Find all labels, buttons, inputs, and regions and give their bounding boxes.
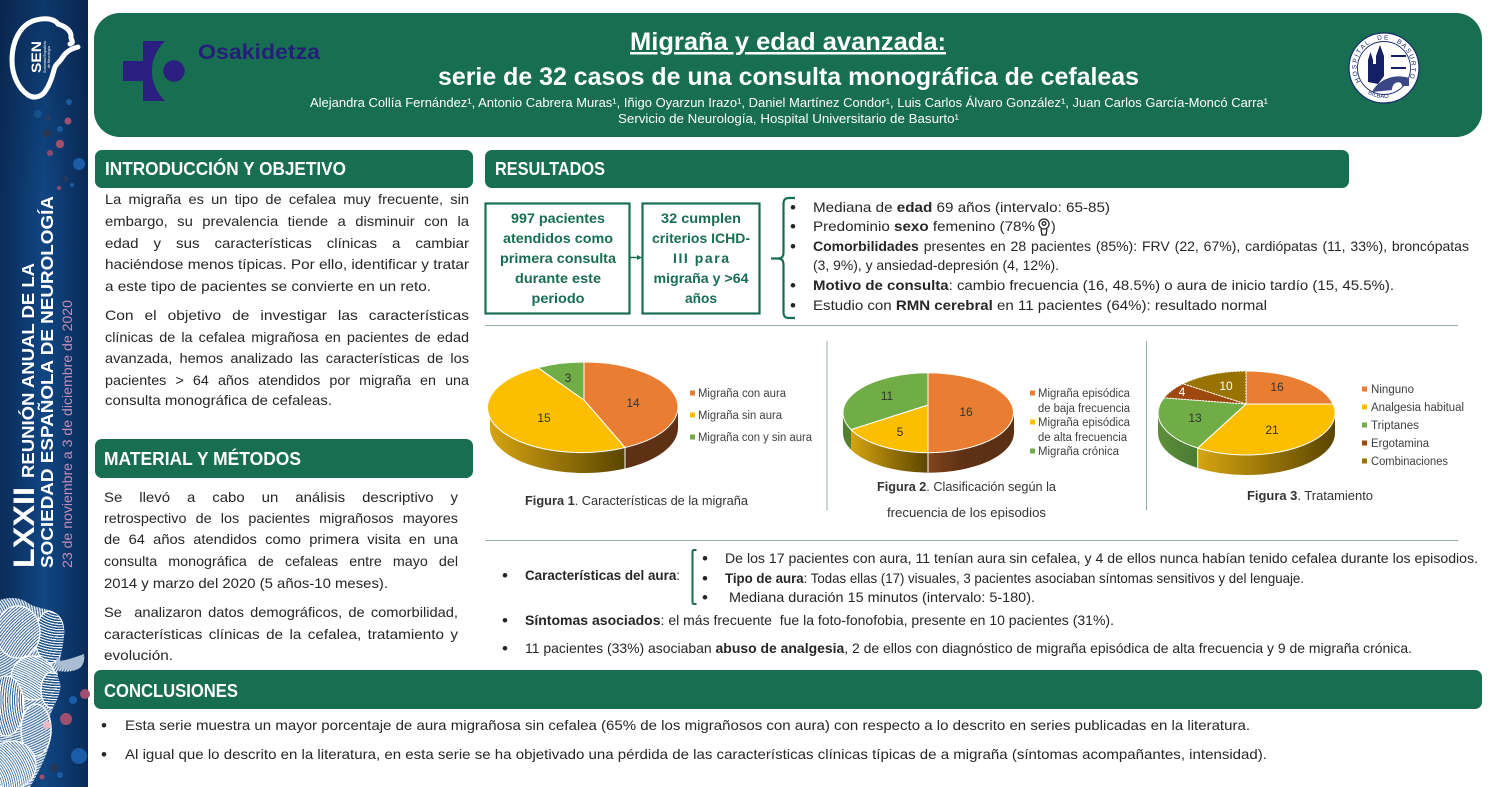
results list: [790, 198, 1469, 315]
results list: •: [790, 296, 796, 315]
results list: •: [790, 276, 796, 295]
vertical congress title: REUNIÓN ANUAL DE LA: [17, 263, 38, 478]
text block: material y métodos: Se analizaron datos demográficos, de comorbilidad,: [104, 604, 458, 620]
hospital seal: [1348, 32, 1420, 104]
aura characteristics block: •: [702, 549, 708, 568]
Osakidetza logo: Osakidetza: [198, 41, 320, 64]
heading: resultados: [485, 150, 1349, 188]
caption: figura 2: [877, 480, 1056, 520]
SEN logo: Sociedad Española: [43, 41, 47, 73]
chart: figura 1 pie: 15: [537, 411, 551, 425]
chart: figura 1 pie: 14: [626, 396, 640, 410]
text block: material y métodos: Se llevó a cabo un análisis descriptivo y: [104, 489, 458, 505]
chart: figura 3 pie: 21: [1265, 423, 1279, 437]
caption: figura 3: Figura 3. Tratamiento: [1247, 489, 1373, 503]
flow box: criterios ICHD: 32 cumplen: [661, 210, 741, 226]
poster subtitle: serie de 32 casos de una consulta monográfica de cefaleas: [438, 63, 1139, 91]
results list: ): [1051, 218, 1056, 234]
legend: figura 1: Migraña con aura: [698, 388, 787, 400]
left sidebar banner: [0, 0, 90, 787]
heading: conclusiones: [94, 670, 1482, 709]
icon: female patient: [1039, 219, 1049, 235]
aura characteristics block: Características del aura:: [525, 567, 680, 583]
chart: figura 3 pie: 4: [1179, 385, 1186, 399]
brain illustration: [0, 590, 90, 787]
header panel: [94, 13, 1482, 137]
results list: Motivo de consulta : cambio frecuencia (16, 48.5%) o aura de inicio tardío (15, 45.5%).: [813, 277, 1394, 293]
text block: introducción: embargo, su prevalencia tiende a disminuir con la: [105, 213, 469, 229]
legend: figura 1: [690, 388, 813, 444]
vertical congress title: LXXII: [8, 487, 41, 568]
results list: •: [790, 237, 796, 256]
chart: figura 1 pie: 3: [565, 371, 572, 385]
legend: figura 2: Migraña episódica: [1038, 388, 1131, 400]
text block: introducción: consulta monográfica de cefaleas.: [105, 392, 332, 408]
aura characteristics block: De los 17 pacientes con aura, 11 tenían aura sin cefalea, y 4 de ellos nunca habían tenido cefalea durante los episodios.: [725, 550, 1478, 566]
arrow between boxes: [630, 255, 642, 260]
heading: resultados: RESULTADOS: [495, 159, 605, 179]
heading: introducción y objetivo: [95, 150, 473, 188]
legend: figura 3: Ergotamina: [1371, 438, 1430, 450]
flow box: criterios ICHD: años: [685, 290, 717, 306]
legend: figura 3: Ninguno: [1371, 384, 1414, 396]
results list: Comorbilidades presentes en 28 pacientes (85%): FRV (22, 67%), cardiópatas (11, 33%), broncópatas: [813, 238, 1469, 254]
conclusions list: Esta serie muestra un mayor porcentaje de aura migrañosa sin cefalea (65% de los migrañosos con aura) con respecto a lo descrito en series publicadas en la literatura.: [125, 717, 1250, 733]
chart: figura 3 pie: [1158, 371, 1335, 475]
results list: Estudio con RMN cerebral en 11 pacientes (64%): resultado normal: [813, 297, 1267, 313]
Osakidetza logo: [123, 41, 320, 101]
flow box: pacientes atendidos: 997 pacientes: [511, 210, 605, 226]
results list: Mediana de edad 69 años (intervalo: 65-85): [813, 199, 1110, 215]
flow box: criterios ICHD: [642, 204, 760, 314]
analgesic abuse: •: [502, 639, 508, 658]
legend: figura 3: Analgesia habitual: [1371, 402, 1464, 414]
legend: figura 2: [1030, 388, 1131, 458]
caption: figura 1: Figura 1. Características de la migraña: [525, 494, 748, 508]
heading: conclusiones: CONCLUSIONES: [104, 681, 238, 701]
legend: figura 2: de alta frecuencia: [1038, 432, 1128, 444]
legend: figura 1: Migraña con y sin aura: [698, 432, 813, 444]
SEN logo: de Neurología: [47, 46, 51, 68]
text block: introducción: pacientes > 64 años atendidos por migraña en una: [105, 372, 469, 388]
legend: figura 3: Combinaciones: [1371, 456, 1448, 468]
flow box: criterios ICHD: migraña y >64: [654, 270, 749, 286]
caption: figura 2: frecuencia de los episodios: [887, 506, 1046, 520]
poster title: Migraña y edad avanzada:: [630, 28, 946, 56]
vertical congress title: SOCIEDAD ESPAÑOLA DE NEUROLOGÍA: [36, 196, 57, 568]
congress dates: 23 de noviembre a 3 de diciembre de 2020: [59, 300, 75, 568]
analgesic abuse: 11 pacientes (33%) asociaban abuso de analgesia, 2 de ellos con diagnóstico de migraña episódica de alta frecuencia y 9 de migraña crónica.: [525, 640, 1412, 656]
authors: Alejandra Collía Fernández¹, Antonio Cabrera Muras¹, Iñigo Oyarzun Irazo¹, Daniel Martínez Condor¹, Luis Carlos Álvaro González¹, Juan Carlos García-Moncó Carra¹: [310, 95, 1268, 110]
associated symptoms: •: [502, 611, 508, 630]
text block: introducción: clínicas de la cefalea migrañosa en pacientes de edad: [105, 329, 469, 345]
text block: material y métodos: consulta monográfica de cefaleas entre mayo del: [104, 553, 458, 569]
flow box: criterios ICHD: III para: [673, 250, 729, 266]
conclusions list: •: [101, 716, 107, 735]
conclusions list: •: [101, 745, 107, 764]
flow box: pacientes atendidos: primera consulta: [500, 250, 616, 266]
text block: material y métodos: de 64 años atendidos como primera visita en una: [104, 531, 458, 547]
SEN logo: [12, 19, 78, 97]
hospital seal: HOSPITAL DE BASURTO: [1352, 35, 1416, 84]
aura characteristics block: Mediana duración 15 minutos (intervalo: 5-180).: [729, 589, 1035, 605]
text block: introducción: haciéndose menos típicas. Por ello, identificar y tratar: [105, 256, 469, 272]
conclusions list: Al igual que lo descrito en la literatura, en esta serie se ha objetivado una pérdida de las características clínicas típicas de a migraña (síntomas acompañantes, intensidad).: [125, 746, 1267, 762]
flow box: pacientes atendidos: atendidos como: [503, 230, 613, 246]
results list: Predominio sexo femenino (78%: [813, 218, 1035, 234]
results list: •: [790, 198, 796, 217]
text block: material y métodos: 2014 y marzo del 2020 (5 años-10 meses).: [104, 575, 388, 591]
text block: material y métodos: evolución.: [104, 647, 173, 663]
decorative network dots, top: [34, 99, 85, 190]
text block: introducción: avanzada, hemos analizado las características de los: [105, 350, 469, 366]
text block: introducción: [105, 191, 469, 408]
results list: (3, 9%), y ansiedad-depresión (4, 12%).: [813, 257, 1059, 273]
legend: figura 3: [1362, 384, 1464, 468]
aura characteristics block: Tipo de aura: Todas ellas (17) visuales, 3 pacientes asociaban síntomas sensitivos y del lenguaje.: [725, 570, 1304, 586]
heading: introducción y objetivo: INTRODUCCIÓN Y OBJETIVO: [105, 158, 346, 179]
legend: figura 2: Migraña crónica: [1038, 446, 1120, 458]
text block: introducción: La migraña es un tipo de cefalea muy frecuente, sin: [105, 191, 469, 207]
hospital seal: BILBAO: [1368, 90, 1388, 98]
aura characteristics block: •: [502, 566, 508, 585]
chart: figura 1 pie: [487, 362, 678, 473]
chart: figura 3 pie: 16: [1270, 380, 1284, 394]
text block: introducción: Con el objetivo de investigar las características: [105, 307, 469, 323]
chart: figura 3 pie: 10: [1219, 379, 1233, 393]
SEN logo: SEN: [28, 41, 44, 73]
text block: material y métodos: [104, 489, 458, 663]
aura characteristics block: [502, 549, 1478, 607]
decorative network dots, bottom: [40, 689, 90, 780]
chart: figura 2 pie: 16: [959, 405, 973, 419]
chart: figura 3 pie: 13: [1188, 411, 1202, 425]
text block: introducción: edad y sus características clínicas a cambiar: [105, 235, 469, 251]
legend: figura 3: Triptanes: [1371, 420, 1419, 432]
heading: material y métodos: [95, 439, 473, 478]
heading: material y métodos: MATERIAL Y MÉTODOS: [104, 448, 301, 469]
chart: figura 2 pie: [843, 373, 1014, 473]
bracket: [692, 550, 696, 604]
flow box: pacientes atendidos: durante este: [515, 270, 601, 286]
text block: introducción: a este tipo de pacientes se convierte en un reto.: [105, 278, 431, 294]
chart: figura 2 pie: 5: [897, 425, 904, 439]
flow box: pacientes atendidos: [486, 204, 630, 314]
flow box: criterios ICHD: criterios ICHD-: [652, 230, 750, 246]
conclusions list: [101, 716, 1267, 764]
results list: •: [790, 217, 796, 236]
vertical congress title: [8, 196, 57, 568]
text block: material y métodos: retrospectivo de los pacientes migrañosos mayores: [104, 510, 458, 526]
legend: figura 2: Migraña episódica: [1038, 417, 1131, 429]
aura characteristics block: •: [702, 588, 708, 607]
flow box: pacientes atendidos: periodo: [532, 290, 584, 306]
affiliation: Servicio de Neurología, Hospital Universitario de Basurto¹: [618, 112, 959, 126]
aura characteristics block: •: [702, 569, 708, 588]
text block: material y métodos: características clínicas de la cefalea, tratamiento y: [104, 626, 458, 642]
chart: figura 2 pie: 11: [881, 389, 894, 403]
associated symptoms: Síntomas asociados: el más frecuente fue la foto-fonofobia, presente en 10 pacientes (31%).: [525, 612, 1114, 628]
brace: [771, 198, 795, 318]
legend: figura 1: Migraña sin aura: [698, 410, 783, 422]
caption: figura 2: Figura 2. Clasificación según la: [877, 480, 1056, 494]
legend: figura 2: de baja frecuencia: [1038, 403, 1131, 415]
